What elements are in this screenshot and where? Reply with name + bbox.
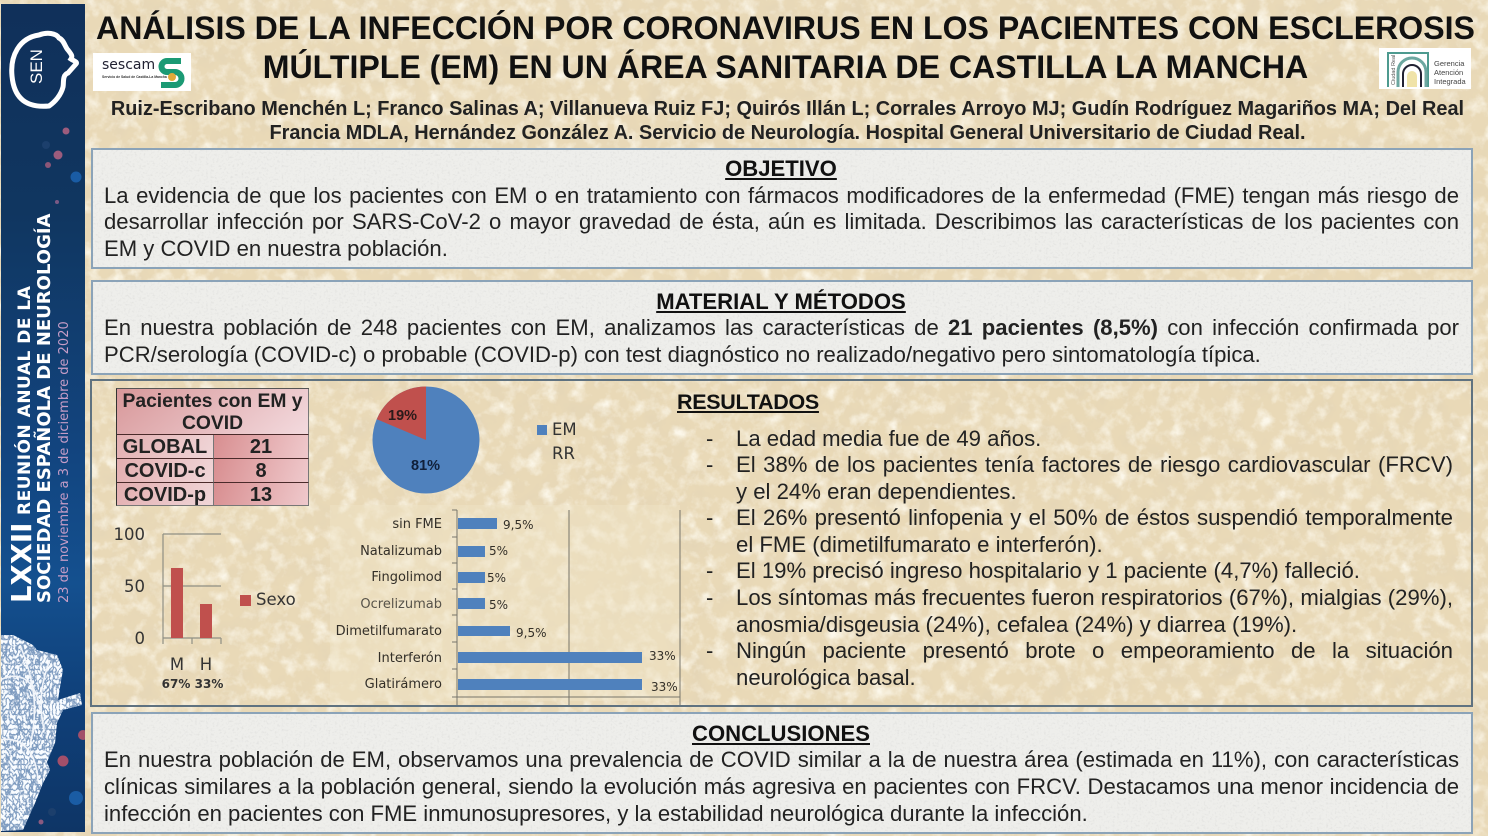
bar chart: tratamientos: 33% (651, 680, 678, 694)
pie chart: EM RR: RR (552, 444, 575, 463)
table: pacientes (116, 388, 309, 506)
table: pacientes: 21 (250, 436, 272, 458)
icon: SEN logo (9, 30, 79, 109)
conference text (6, 214, 72, 603)
logo: sescam: sescam (102, 57, 155, 73)
bar chart: sexo: 50 (124, 577, 145, 596)
text: - (706, 426, 713, 451)
bar chart: tratamientos: 9,5% (503, 518, 534, 532)
conference text: REUNIÓN ANUAL DE LA (15, 286, 35, 515)
pie chart: EM RR: 81% (411, 458, 440, 474)
list: resultados (706, 426, 1453, 690)
logo: Gerencia Atención Integrada: Gerencia (1434, 59, 1464, 68)
bar chart: tratamientos: 5% (489, 598, 508, 612)
text: - (706, 558, 713, 583)
bar chart: tratamientos: Fingolimod (371, 570, 442, 585)
text: objetivo: EM y COVID en nuestra población. (104, 236, 448, 261)
icon: SEN logo: SEN (27, 49, 46, 84)
text: objetivo: La evidencia de que los pacientes con EM o en tratamiento con fármacos modificadores de la enfermedad (FME) tengan más riesgo de (104, 183, 1459, 208)
pie chart: EM RR: EM (552, 420, 577, 439)
authors: Ruiz-Escribano Menchén L; Franco Salinas A; Villanueva Ruiz FJ; Quirós Illán L; Corrales Arroyo MJ; Gudín Rodríguez Magariños MA; Del Real (111, 98, 1464, 120)
text: el FME (dimetilfumarato e interferón). (736, 532, 1103, 557)
conference text: SOCIEDAD ESPAÑOLA DE NEUROLOGÍA (34, 214, 55, 603)
heading: conclusiones: CONCLUSIONES (692, 721, 870, 746)
authors (111, 98, 1464, 144)
bar chart: sexo: 67% (162, 677, 190, 691)
bar chart: sexo: 100 (114, 525, 145, 544)
table: pacientes: 13 (250, 484, 272, 506)
text: conclusiones (104, 747, 1459, 826)
text: - (706, 452, 713, 477)
bar chart: tratamientos (330, 505, 680, 705)
bar chart: tratamientos: 9,5% (516, 626, 546, 640)
text: objetivo: desarrollar infección por SARS-CoV-2 o mayor gravedad de ésta, aún es limitada. Describimos las características de los pacientes con (104, 209, 1459, 234)
title (96, 10, 1475, 85)
text: El 26% presentó linfopenia y el 50% de éstos suspendió temporalmente (736, 505, 1453, 530)
text: conclusiones: En nuestra población de EM, observamos una prevalencia de COVID similar a la de nuestra área (estimada en 11%), con características (104, 747, 1459, 772)
table: pacientes: COVID-c (124, 460, 206, 482)
heading: resultados: RESULTADOS (677, 390, 819, 414)
table: pacientes: GLOBAL (123, 436, 207, 458)
table: pacientes: COVID (182, 413, 243, 434)
title: ANÁLISIS DE LA INFECCIÓN POR CORONAVIRUS EN LOS PACIENTES CON ESCLEROSIS (96, 10, 1475, 46)
bar chart: sexo: 33% (195, 677, 223, 691)
text: y el 24% eran dependientes. (736, 479, 1017, 504)
logo: sescam (93, 53, 191, 91)
text: anosmia/disgeusia (24%), cefalea (24%) y diarrea (19%). (736, 612, 1297, 637)
bar chart: tratamientos: 5% (489, 544, 508, 558)
text: El 38% de los pacientes tenía factores de riesgo cardiovascular (FRCV) (736, 452, 1453, 477)
bar chart: tratamientos: Glatirámero (365, 677, 442, 692)
bar chart: sexo: M (170, 655, 184, 674)
text: objetivo (104, 183, 1459, 261)
text: material y métodos (104, 315, 1459, 367)
bar chart: tratamientos: 33% (649, 649, 676, 663)
bar chart: tratamientos: Natalizumab (360, 544, 442, 559)
text: Ningún paciente presentó brote o empeoramiento de la situación (736, 638, 1453, 663)
logo: Gerencia Atención Integrada: Ciudad Real (1391, 55, 1397, 85)
text: - (706, 638, 713, 663)
text: neurológica basal. (736, 665, 916, 690)
sidebar banner (1, 4, 85, 832)
table: pacientes: COVID-p (124, 484, 206, 506)
text: - (706, 585, 713, 610)
logo: Gerencia Atención Integrada (1379, 48, 1471, 89)
conference text: LXXII (6, 523, 38, 603)
bar chart: sexo (114, 525, 296, 691)
text: material y métodos: PCR/serología (COVID-c) o probable (COVID-p) con test diagnóstico no realizado/negativo pero sintomatología típica. (104, 342, 1261, 367)
bar chart: tratamientos: Ocrelizumab (360, 597, 442, 612)
bar chart: sexo: H (200, 655, 212, 674)
text: material y métodos: En nuestra población de 248 pacientes con EM, analizamos las características de 21 pacientes (8,5%) con infección confirmada por (104, 315, 1459, 340)
authors: Francia MDLA, Hernández González A. Servicio de Neurología. Hospital General Universitario de Ciudad Real. (269, 122, 1306, 144)
panel: resultados (90, 379, 1473, 707)
decorative network dots (1, 128, 85, 831)
panel: objetivo (91, 148, 1473, 269)
table: pacientes: 8 (255, 460, 267, 482)
logo: Gerencia Atención Integrada: Atención (1434, 68, 1463, 77)
logo: sescam: Servicio de Salud de Castilla-La Mancha (102, 75, 167, 79)
bar chart: sexo: Sexo (256, 590, 296, 609)
text: Los síntomas más frecuentes fueron respiratorios (67%), mialgias (29%), (736, 585, 1453, 610)
bar chart: tratamientos: Interferón (378, 651, 442, 666)
pie chart: EM RR (372, 386, 577, 494)
bar chart: tratamientos: sin FME (392, 517, 442, 532)
text: conclusiones: infección en pacientes con FME inmunosupresores, y la estabilidad neurológica durante la infección. (104, 801, 1088, 826)
panel: material y métodos (91, 280, 1473, 375)
bar chart: sexo: 0 (134, 629, 145, 648)
heading: material y métodos: MATERIAL Y MÉTODOS (656, 289, 906, 314)
text: - (706, 505, 713, 530)
title: MÚLTIPLE (EM) EN UN ÁREA SANITARIA DE CASTILLA LA MANCHA (263, 49, 1308, 85)
heading: objetivo: OBJETIVO (725, 156, 837, 181)
bar chart: tratamientos: 5% (487, 571, 506, 585)
bar chart: tratamientos: Dimetilfumarato (336, 624, 442, 639)
conference text: 23 de noviembre a 3 de diciembre de 2020 (57, 321, 72, 603)
text: conclusiones: clínicas similares a la población general, siendo la evolución más agresiva en pacientes con FRCV. Destacamos una menor incidencia de (104, 774, 1459, 799)
logo: Gerencia Atención Integrada: Integrada (1434, 77, 1466, 86)
text: El 19% precisó ingreso hospitalario y 1 paciente (4,7%) falleció. (736, 558, 1360, 583)
text: La edad media fue de 49 años. (736, 426, 1041, 451)
panel: conclusiones (91, 712, 1473, 834)
table: pacientes: Pacientes con EM y (122, 391, 303, 412)
pie chart: EM RR: 19% (388, 408, 417, 424)
